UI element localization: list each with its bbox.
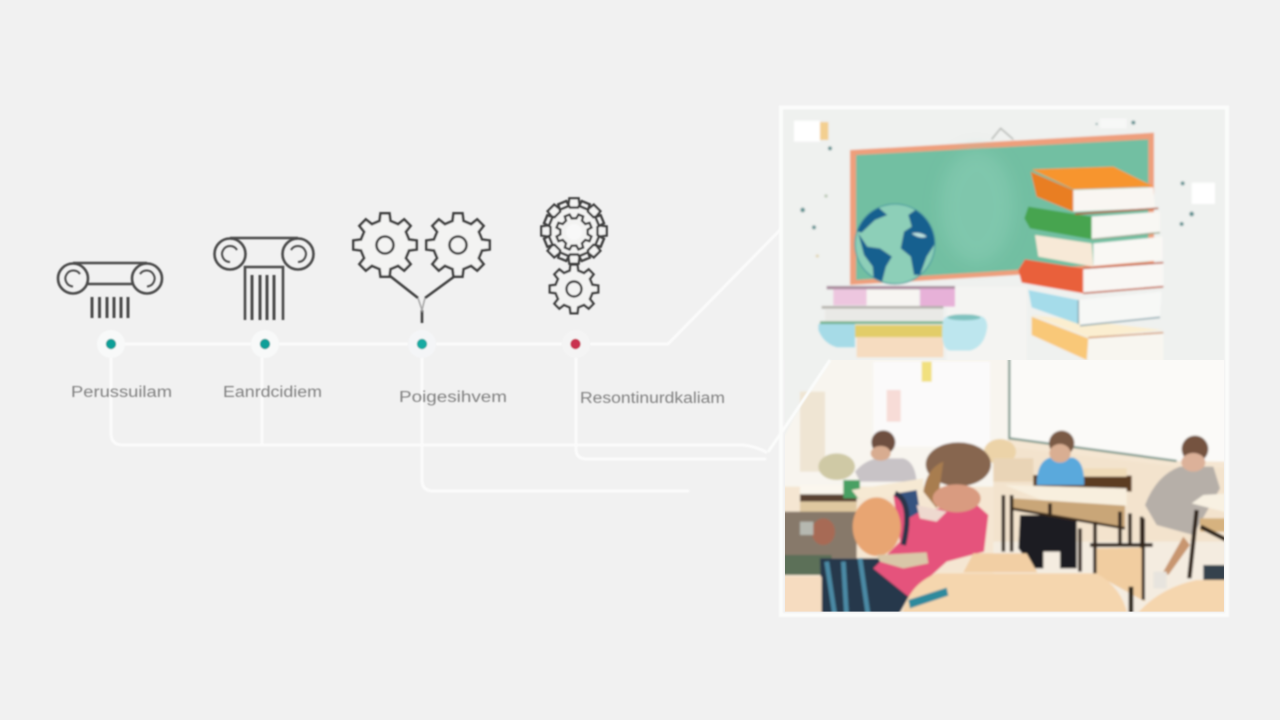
chalkboard [850,128,1154,285]
node: teal marker [408,330,436,358]
icon: tall ionic column [214,238,314,320]
right desk and student [1145,436,1230,588]
node: teal marker [251,330,279,358]
left book stack and bowl [818,286,987,357]
panel frame [768,108,1227,615]
timeline item: Perennialism [58,263,172,401]
label: Reconstructionism: Resontinurdkaliam [580,390,725,407]
panel: classroom photo [780,355,1230,622]
node: teal marker [97,330,125,358]
center desk and student in blue [993,429,1154,575]
timeline item: Essentialism [214,238,322,401]
label: Perennialism: Perussuilam [71,384,172,401]
foreground desks [780,518,1230,618]
connector lines [111,228,782,491]
label: Progressivism: Poigesihvem [399,389,507,406]
foreground student in pink with bag [780,442,991,618]
timeline item: Reconstructionism [534,191,725,407]
walls and windows [780,355,1230,622]
globe [854,204,935,284]
panel: classroom illustration [794,119,1214,360]
timeline item: Progressivism [353,213,507,406]
decorative notes and specks [794,118,1215,258]
icon: stacked gears [534,191,614,313]
node: red marker [562,330,590,358]
icon: short ionic column [58,263,162,318]
right book stack [1018,167,1163,367]
back left desk and student [800,430,1016,513]
infographic canvas [56,106,1228,616]
label: Essentialism: Eanrdcidiem [223,384,322,401]
icon: twin gears with fork [353,213,490,323]
